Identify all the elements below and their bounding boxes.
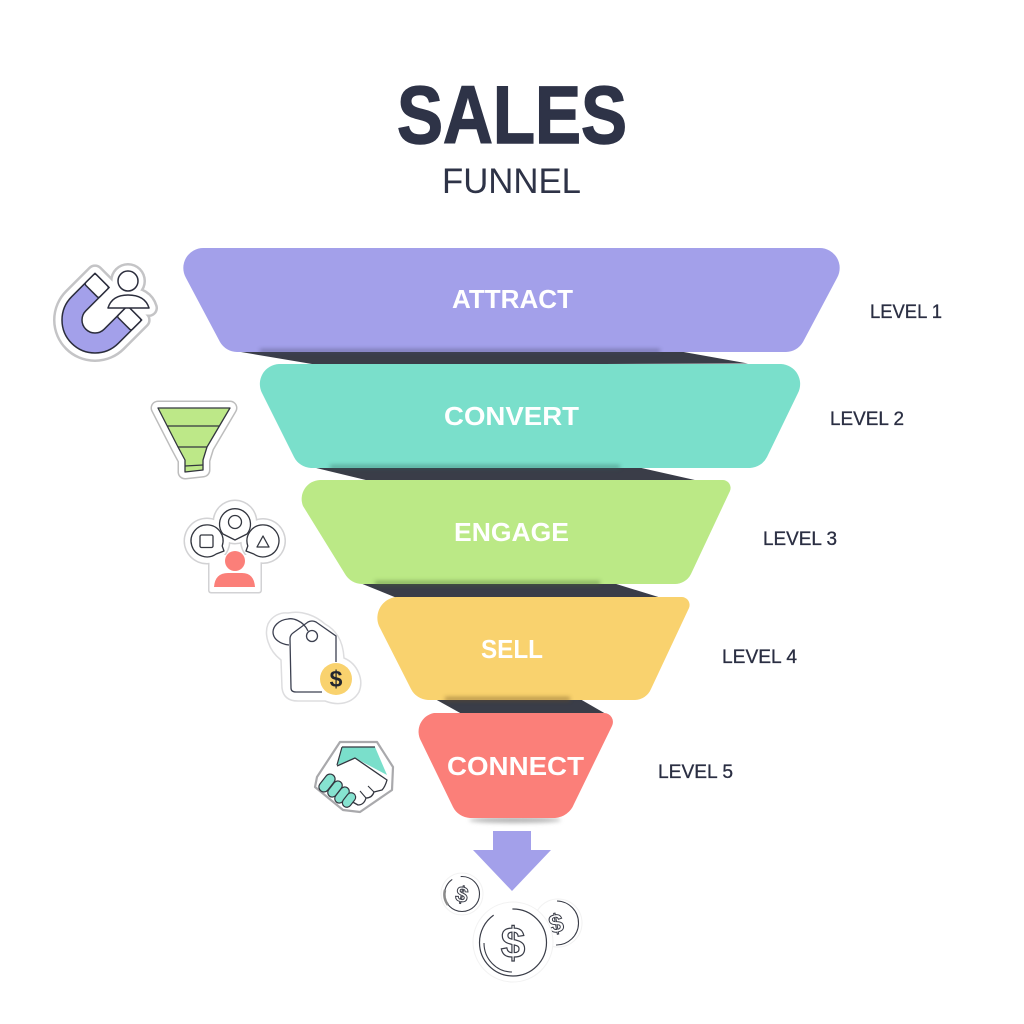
label: engage: ENGAGE (454, 517, 569, 547)
subtitle: FUNNEL (442, 162, 581, 201)
band: connect (419, 713, 613, 823)
icon: magnet with person (48, 263, 149, 367)
coin: right: $ (546, 907, 566, 939)
level labels: LEVEL 1 (870, 302, 942, 323)
icon: price tag: $ (330, 666, 343, 692)
label: convert: CONVERT (444, 401, 579, 431)
icon: funnel (158, 408, 230, 472)
icon: price tag (267, 612, 361, 704)
label: connect: CONNECT (447, 751, 584, 781)
band: sell (377, 597, 690, 701)
band: attract (183, 248, 840, 353)
label: sell: SELL (481, 634, 543, 664)
coins (441, 873, 582, 982)
coin: large: $ (501, 919, 525, 968)
level labels: LEVEL 3 (763, 529, 837, 550)
title: SALES (397, 70, 627, 161)
arrow (473, 831, 551, 891)
level labels (658, 302, 942, 783)
level labels: LEVEL 5 (658, 762, 733, 783)
icon: audience choices (184, 500, 286, 594)
coin: left (441, 873, 483, 915)
band: engage (302, 480, 731, 585)
funnel connector shadows (235, 351, 748, 714)
icon: handshake (315, 742, 393, 812)
level labels: LEVEL 4 (722, 647, 797, 668)
coin: large (473, 902, 553, 982)
band: convert (260, 364, 800, 469)
coin: right (534, 899, 582, 947)
label: attract: ATTRACT (452, 284, 573, 314)
coin: left: $ (453, 881, 470, 908)
level labels: LEVEL 2 (830, 409, 904, 430)
title (397, 70, 627, 201)
